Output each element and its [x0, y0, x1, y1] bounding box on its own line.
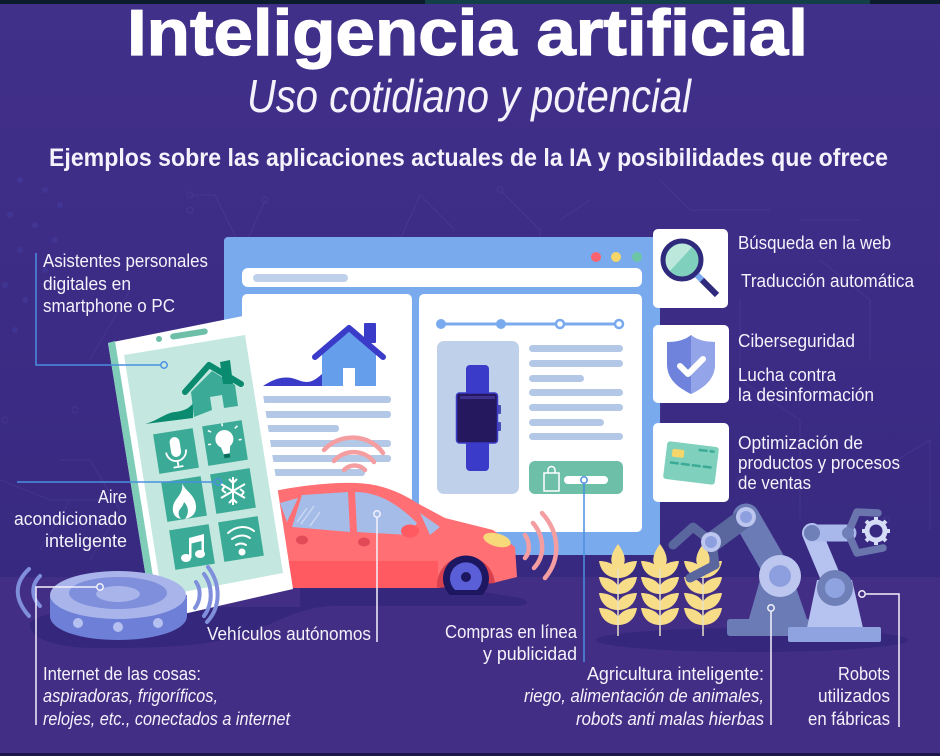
callout: internet of things: aspiradoras, frigoríficos,	[43, 686, 218, 706]
car sensor waves	[525, 513, 556, 578]
text: sales optimization: de ventas	[738, 473, 811, 493]
icon: snowflake	[221, 477, 245, 505]
callout: online shopping: y publicidad	[483, 644, 577, 664]
card: credit card	[653, 423, 729, 502]
illustration: wifi signal above car	[324, 438, 383, 470]
callout: personal assistants	[36, 251, 208, 368]
callout: personal assistants: digitales en	[43, 274, 131, 294]
text: cybersecurity and disinformation: la desinformación	[738, 385, 874, 405]
buy button	[529, 461, 623, 494]
icon: light bulb	[205, 421, 244, 460]
text: sales optimization: productos y procesos	[738, 453, 900, 473]
callout: personal assistants: Asistentes personales	[43, 251, 208, 271]
callout: smart agriculture: riego, alimentación de animales,	[524, 686, 764, 706]
text: cybersecurity and disinformation: Ciberseguridad	[738, 331, 855, 351]
illustration: wheat	[599, 544, 722, 636]
card: web search	[653, 229, 728, 308]
illustration: shadows on floor	[30, 588, 908, 652]
illustration: smartphone	[108, 315, 293, 621]
icon: smart home	[145, 360, 241, 424]
icon: wifi	[228, 527, 254, 554]
callout: autonomous vehicles	[207, 511, 380, 644]
callout: personal assistants: smartphone o PC	[43, 296, 175, 316]
illustration: browser window	[224, 237, 660, 555]
callout: factory robots: utilizados	[818, 686, 890, 706]
text: sales optimization	[738, 433, 900, 493]
callout: autonomous vehicles: Vehículos autónomos	[207, 624, 371, 644]
callout: online shopping	[445, 477, 587, 664]
illustration: dark robot arm	[673, 507, 810, 636]
illustration: red autonomous car	[262, 483, 517, 595]
subtitle: Uso cotidiano y potencial	[247, 70, 693, 122]
illustration: light robot arm	[788, 512, 890, 642]
callout: smart agriculture	[524, 605, 774, 729]
icon: flame	[173, 483, 196, 519]
text: sales optimization: Optimización de	[738, 433, 863, 453]
callout: smart agriculture: robots anti malas hierbas	[576, 709, 764, 729]
illustration: robot vacuum	[18, 567, 218, 640]
panel: right web page, smartwatch shop	[419, 294, 642, 532]
heading: Ejemplos sobre las aplicaciones actuales de la IA y posibilidades que ofrece	[49, 144, 888, 172]
card: cybersecurity shield	[653, 325, 729, 403]
callout: smart air conditioning: Aire	[98, 487, 127, 507]
car wheel	[443, 555, 489, 595]
icon: smartwatch	[456, 365, 501, 471]
text: cybersecurity and disinformation: Lucha contra	[738, 365, 837, 385]
text: web search and translation	[738, 233, 915, 291]
callout: internet of things: relojes, etc., conectados a internet	[43, 709, 291, 729]
callout: factory robots	[808, 591, 899, 729]
panel: left web page	[242, 294, 412, 544]
callout: factory robots: Robots	[838, 664, 890, 684]
icon: microphone	[164, 436, 188, 468]
text: cybersecurity and disinformation	[738, 331, 874, 405]
icon: music note	[181, 534, 205, 562]
callout: internet of things	[36, 584, 291, 729]
icon grid	[153, 420, 264, 570]
callout: internet of things: Internet de las cosas:	[43, 664, 201, 684]
callout: smart air conditioning	[14, 479, 221, 551]
callout: smart air conditioning: inteligente	[45, 531, 127, 551]
callout: factory robots: en fábricas	[808, 709, 890, 729]
text: web search and translation: Traducción automática	[741, 271, 915, 291]
callout: online shopping: Compras en línea	[445, 622, 578, 642]
icon: gear	[862, 517, 890, 545]
callout: smart agriculture: Agricultura inteligente:	[587, 664, 764, 684]
callout: smart air conditioning: acondicionado	[14, 509, 127, 529]
text: web search and translation: Búsqueda en la web	[738, 233, 891, 253]
